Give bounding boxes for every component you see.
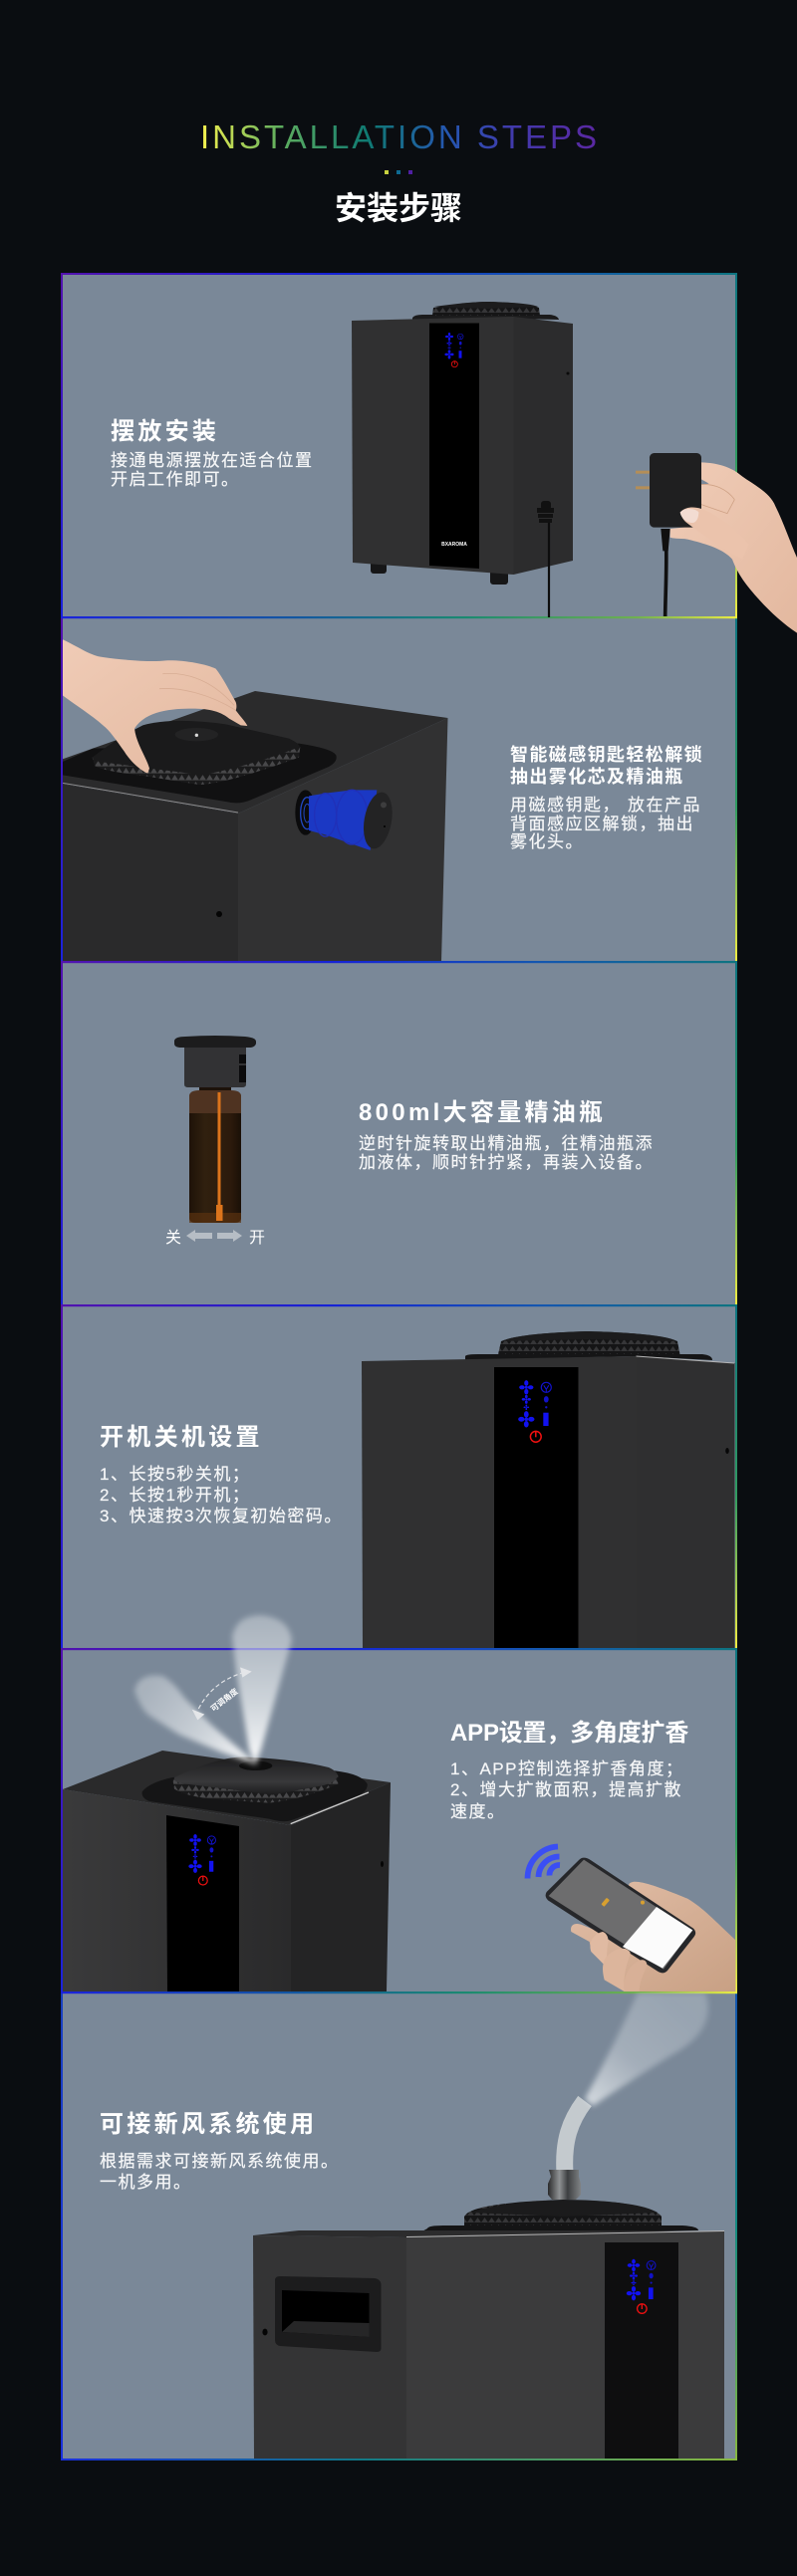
title dots <box>385 170 412 174</box>
hand holding phone <box>546 1858 735 1991</box>
step 5 heading: APP设置，多角度扩香 <box>450 1720 688 1747</box>
control strip <box>494 1367 578 1648</box>
nozzle <box>175 728 218 741</box>
bottle cap collar <box>184 1046 246 1087</box>
dashed arc <box>198 1673 242 1709</box>
hand behind <box>670 462 797 633</box>
icon: wifi signal <box>527 1846 560 1878</box>
step 6 body text: 根据需求可接新风系统使用。 <box>100 2152 339 2171</box>
step 5 body text: 2、增大扩散面积，提高扩散 <box>450 1780 682 1799</box>
bottle liquid <box>189 1113 241 1223</box>
disc dome <box>502 1331 676 1341</box>
arrow right <box>217 1230 242 1242</box>
phone screen white panel <box>623 1907 692 1969</box>
thumbnail <box>680 509 698 523</box>
mist: step 5 angled plume <box>134 1676 257 1764</box>
step 4 body text: 1、长按5秒关机； <box>100 1465 250 1484</box>
top flange <box>418 2225 698 2233</box>
cap <box>174 1036 256 1048</box>
top disc <box>498 1331 679 1354</box>
step 2 heading: 智能磁感钥匙轻松解锁 <box>510 745 703 765</box>
box edge highlights <box>61 783 238 813</box>
thumb <box>681 507 749 560</box>
knob top <box>174 1756 338 1795</box>
step 4 body text: 3、快速按3次恢复初始密码。 <box>100 1507 343 1525</box>
top edge highlight <box>406 2230 724 2236</box>
side hole <box>381 1861 384 1867</box>
finger: index <box>590 1932 609 1965</box>
side face <box>636 1356 735 1648</box>
step 2 body text: 用磁感钥匙， <box>510 796 621 815</box>
control icons <box>627 2259 656 2313</box>
side hole <box>262 2329 268 2335</box>
hand holding adapter <box>636 453 797 633</box>
phone screen dark <box>549 1860 691 1970</box>
disc dome <box>434 302 538 309</box>
flange <box>465 1354 712 1360</box>
handle inner <box>282 2290 369 2337</box>
control icons <box>444 333 463 367</box>
step 1 body text: 接通电源摆放在适合位置 <box>111 451 313 470</box>
app accent <box>601 1898 645 1907</box>
tube fitting <box>548 2170 581 2200</box>
step 6 heading: 可接新风系统使用 <box>100 2111 317 2138</box>
box side face <box>238 718 448 962</box>
finger: ring <box>624 1960 647 1991</box>
front face <box>362 1356 636 1648</box>
handle inner lower lip <box>282 2321 369 2337</box>
device: step 4 front view <box>362 1331 735 1648</box>
top diffuser disc <box>432 302 540 316</box>
phone body <box>546 1858 695 1973</box>
control strip <box>605 2242 678 2459</box>
step 5: device <box>63 1751 391 1991</box>
finger gap <box>700 479 709 485</box>
front hole <box>216 911 222 917</box>
front face <box>406 2230 724 2459</box>
bottle neck <box>199 1087 231 1093</box>
handle recess <box>275 2276 381 2352</box>
finger shading <box>700 484 734 514</box>
control strip <box>166 1815 239 1991</box>
step 1 body text: 开启工作即可。 <box>111 470 239 489</box>
atomizer cap <box>364 793 393 848</box>
knob top <box>93 721 300 775</box>
blue extraction ghost <box>309 790 377 850</box>
top edge highlight <box>291 1792 369 1824</box>
panel: step 6 background <box>61 1992 737 2459</box>
step 2 heading: 抽出雾化芯及精油瓶 <box>510 766 684 787</box>
step 6: device <box>253 2101 724 2459</box>
step 5 body text: 1、APP控制选择扩香角度； <box>450 1759 683 1778</box>
step 3 heading: 800ml大容量精油瓶 <box>359 1099 606 1126</box>
cap windows <box>239 1054 246 1082</box>
control strip <box>429 323 479 569</box>
side hole <box>725 1448 729 1454</box>
step 3 body text: 加液体，顺时针拧紧，再装入设备。 <box>359 1153 654 1172</box>
control icons <box>188 1834 215 1885</box>
top flange <box>412 315 559 320</box>
step 4 heading: 开机关机设置 <box>100 1424 263 1451</box>
box front face <box>61 784 238 962</box>
nozzle <box>239 1761 272 1770</box>
dip tube <box>216 1092 223 1221</box>
device front <box>352 317 514 575</box>
step 3 body text: 逆时针旋转取出精油瓶，往精油瓶添 <box>359 1134 654 1153</box>
arrow left <box>186 1230 212 1242</box>
adapter prongs <box>636 471 651 489</box>
knob bevel <box>93 747 300 785</box>
socket <box>295 790 313 835</box>
extraction rings <box>315 790 368 844</box>
angle arrow <box>192 1667 252 1720</box>
panel: step 4 background <box>61 1305 737 1649</box>
air tube <box>565 2101 585 2173</box>
subtitle: 安装步骤 <box>335 190 462 226</box>
power connector and cable <box>537 501 554 617</box>
top flange <box>142 1770 368 1821</box>
box top sliver <box>253 2230 724 2237</box>
close label: 关 <box>165 1229 181 1247</box>
side face <box>291 1782 391 1991</box>
device side <box>514 317 573 575</box>
front face <box>63 1789 291 1991</box>
bottle bottom tint <box>189 1213 241 1223</box>
panel: step 1 place and install background <box>61 274 737 617</box>
step 2: device and hand <box>58 637 448 962</box>
box top face <box>61 691 448 814</box>
mist: fresh air tube <box>585 1992 708 2106</box>
adapter body <box>650 453 701 528</box>
disc dome <box>470 2200 658 2217</box>
icon: device feet <box>371 561 508 585</box>
open label: 开 <box>249 1230 265 1247</box>
angle label: 可调角度 <box>208 1686 240 1714</box>
top flange <box>63 744 337 803</box>
arrowheads <box>192 1667 252 1720</box>
finger: middle <box>603 1949 631 1991</box>
step 2 body text: 雾化头。 <box>510 832 584 851</box>
step 4 body text: 2、长按1秒开机； <box>100 1486 250 1505</box>
panel: step 5 background <box>61 1649 737 1992</box>
step 1 heading: 摆放安装 <box>111 418 219 445</box>
adapter cable <box>661 529 670 616</box>
bottle upper <box>189 1090 241 1113</box>
finger lines <box>159 673 236 710</box>
step 2 body text: 放在产品 <box>628 796 701 815</box>
control icons <box>518 1380 551 1442</box>
brand label: BXAROMA <box>441 542 467 548</box>
top disc <box>464 2200 662 2225</box>
hand pressing knob <box>58 637 247 774</box>
top face <box>63 1751 391 1825</box>
top edge highlight <box>636 1356 734 1363</box>
title: INSTALLATION STEPS: INSTALLATION STEPS <box>200 118 597 155</box>
step 3: oil bottle <box>174 1036 256 1223</box>
mist: step 5 vertical plume <box>232 1615 292 1764</box>
panel: step 3 background <box>61 962 737 1305</box>
device: step 1 diffuser <box>352 302 573 617</box>
step 2 body text: 背面感应区解锁，抽出 <box>510 815 694 833</box>
hand back <box>571 1882 735 1991</box>
gradient panel frames <box>61 273 737 2460</box>
step 6 body text: 一机多用。 <box>100 2173 191 2192</box>
left face <box>253 2235 406 2459</box>
side screw hole <box>566 372 570 374</box>
step 5 body text: 速度。 <box>450 1802 506 1821</box>
panel: step 2 background <box>61 617 737 962</box>
knob bevel <box>172 1774 338 1803</box>
